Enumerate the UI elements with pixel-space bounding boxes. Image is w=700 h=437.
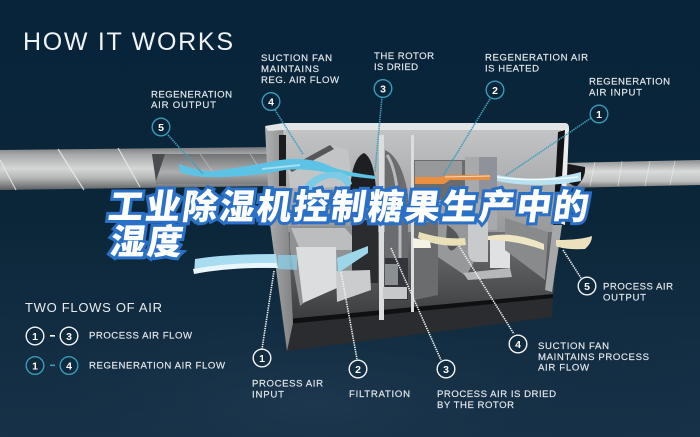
callout: process air input: 1 — [259, 353, 265, 365]
dark fan aperture top — [279, 135, 286, 186]
callout: regeneration air input — [589, 76, 670, 123]
legend row: regeneration air flow: 1 — [32, 360, 38, 372]
process outlet cream ribbons — [413, 232, 592, 250]
black floor edge — [287, 294, 553, 324]
left outer panel — [265, 124, 293, 351]
callout: process air is dried by the rotor — [437, 360, 556, 411]
callout: suction fan maintains reg. air flow: SUCTION FAN — [261, 53, 332, 64]
callout: the rotor is dried: THE ROTOR — [374, 51, 434, 62]
legend row: process air flow — [26, 327, 193, 345]
title: how it works: HOW IT WORKS — [23, 28, 233, 56]
callout: process air output: 5 — [584, 281, 590, 293]
callout: the rotor is dried: 3 — [380, 83, 386, 95]
roof highlight — [265, 123, 569, 131]
callout: regeneration air is heated: IS HEATED — [485, 64, 539, 74]
callout: suction fan maintains reg. air flow — [261, 53, 340, 110]
heading: 工业除湿机控制糖果生产中的 — [106, 187, 591, 227]
regeneration input ribbon — [497, 172, 581, 185]
callout: regeneration air is heated: REGENERATION AIR — [485, 52, 588, 64]
callout: process air output: OUTPUT — [603, 292, 646, 303]
machine base — [284, 296, 553, 351]
callout: regeneration air input: AIR INPUT — [589, 88, 642, 98]
callout: suction fan maintains reg. air flow: 4 — [268, 96, 274, 108]
callout: regeneration air input: 1 — [596, 109, 602, 121]
callout: regeneration air output: AIR OUTPUT — [151, 100, 216, 111]
process fan section — [414, 218, 548, 300]
motor and lower rotor frame — [383, 258, 408, 300]
process filter box — [290, 226, 371, 306]
legend: two flows of air: TWO FLOWS OF AIR — [25, 300, 162, 315]
process air flow ribbons — [193, 246, 368, 274]
machine floor — [280, 218, 558, 322]
callout: regeneration air is heated: 2 — [492, 85, 498, 97]
legend: two flows of air — [25, 300, 226, 374]
left duct — [0, 141, 285, 190]
right duct — [563, 160, 700, 188]
callout: suction fan maintains process air flow: AIR FLOW — [538, 362, 590, 374]
regeneration fan housing — [288, 145, 352, 188]
vertical frame posts — [379, 135, 384, 320]
legend row: regeneration air flow: 4 — [66, 360, 72, 372]
black panel between process stages — [352, 220, 378, 283]
callout: filtration — [349, 360, 410, 400]
machine back wall — [280, 127, 561, 232]
machine cabinet — [265, 123, 569, 351]
callout: process air is dried by the rotor: 3 — [443, 364, 449, 376]
rotor wheel — [385, 150, 408, 290]
callout: suction fan maintains process air flow: 4 — [515, 339, 521, 351]
heater coil — [414, 157, 497, 230]
callout: suction fan maintains process air flow: MAINTAINS PROCESS — [538, 352, 649, 363]
callout: filtration: FILTRATION — [349, 389, 410, 400]
legend row: process air flow: 1 — [32, 331, 38, 343]
callout: regeneration air is heated — [485, 52, 588, 99]
legend row: regeneration air flow — [26, 357, 226, 374]
callout: process air output: PROCESS AIR — [603, 282, 673, 293]
callout: filtration: 2 — [355, 364, 361, 376]
heading: 湿度 — [108, 223, 185, 262]
legend row: process air flow: PROCESS AIR FLOW — [89, 331, 193, 342]
callout: regeneration air input: REGENERATION — [589, 76, 670, 88]
regeneration air flow ribbons — [179, 159, 581, 190]
callout: process air input: INPUT — [252, 390, 284, 400]
callout: process air is dried by the rotor: PROCESS AIR IS DRIED — [437, 389, 556, 400]
callout: suction fan maintains process air flow — [509, 335, 649, 374]
leader lines — [168, 97, 591, 360]
callout: suction fan maintains process air flow: SUCTION FAN — [538, 341, 609, 352]
heated orange ribbon — [415, 175, 490, 184]
legend row: process air flow: 3 — [66, 331, 72, 343]
callout: the rotor is dried — [374, 51, 434, 97]
heading — [106, 187, 591, 262]
callout: suction fan maintains reg. air flow: REG. AIR FLOW — [261, 75, 340, 86]
callout: process air output — [578, 277, 673, 303]
callout: suction fan maintains reg. air flow: MAINTAINS — [261, 64, 319, 75]
callout: regeneration air output: REGENERATION — [151, 90, 232, 100]
callout: the rotor is dried: IS DRIED — [374, 62, 418, 73]
right wall — [556, 128, 569, 225]
callout: regeneration air output — [151, 90, 232, 136]
legend row: regeneration air flow: REGENERATION AIR FLOW — [89, 361, 226, 372]
callout: process air input — [252, 349, 323, 400]
callout: process air is dried by the rotor: BY THE ROTOR — [437, 400, 514, 411]
callout: regeneration air output: 5 — [158, 122, 164, 134]
callout: process air input: PROCESS AIR — [252, 379, 323, 390]
